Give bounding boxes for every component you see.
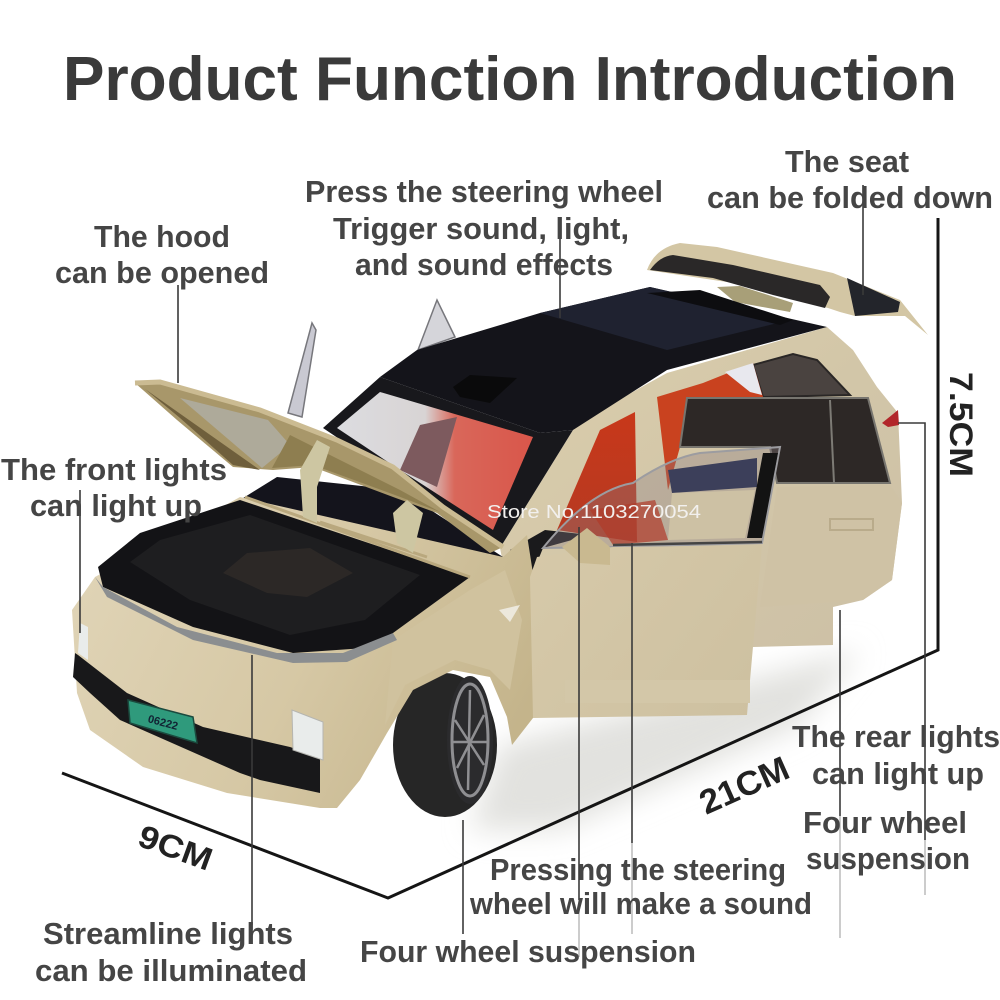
- icon: folded mirrors: [288, 300, 455, 417]
- right headlamp: [292, 710, 323, 760]
- door panel: [530, 545, 762, 718]
- label: steering wheel line 3: and sound effects: [355, 247, 613, 282]
- left headlamp: [78, 623, 88, 660]
- label: the rear lights: The rear lights: [792, 719, 1000, 754]
- dimension: 9CM: 9CM: [134, 818, 217, 878]
- engine cover: [223, 548, 353, 597]
- dimension: 21CM: 21CM: [694, 749, 795, 822]
- side marker: [499, 605, 520, 622]
- dimension: 7.5CM: 7.5CM: [943, 372, 979, 477]
- door pillar: [747, 453, 778, 538]
- callout leader lines: [80, 185, 925, 934]
- car illustration: [72, 243, 928, 817]
- label: can light up rear: can light up: [812, 756, 984, 791]
- label: steering wheel line 2: Trigger sound, light,: [333, 211, 629, 246]
- rear door: [680, 398, 902, 607]
- floor shadow: [470, 650, 860, 830]
- rear quarter window: [753, 354, 850, 397]
- right hood strut: [393, 500, 423, 553]
- chrome strip: [95, 577, 397, 663]
- dimension lines: [62, 218, 938, 898]
- title: Product Function Introduction: [63, 45, 957, 114]
- label: streamline lights: Streamline lights: [43, 916, 293, 951]
- label: the front lights: The front lights: [1, 452, 227, 487]
- label: the hood: The hood: [94, 219, 230, 254]
- label: four wheel: Four wheel: [803, 805, 967, 840]
- label: can be opened: can be opened: [55, 255, 269, 290]
- left hood strut: [300, 440, 330, 523]
- windshield: [323, 377, 573, 548]
- cowl strip: [245, 497, 470, 577]
- engine bay: [98, 500, 470, 653]
- taillight: [882, 410, 899, 427]
- label: the seat: The seat: [785, 144, 909, 179]
- label: pressing the steering: Pressing the steering: [490, 852, 786, 887]
- label: can light up front: can light up: [30, 488, 202, 523]
- faint leader line tails: [579, 816, 925, 957]
- engine bay surround and cowl: [240, 477, 503, 577]
- open hood: [135, 382, 503, 553]
- front door: [530, 447, 780, 718]
- side body: [500, 327, 902, 700]
- fender highlight: [385, 570, 522, 725]
- front body: [72, 497, 534, 808]
- license plate: [128, 700, 197, 743]
- cabin windows: [557, 363, 763, 542]
- black under front door: [510, 530, 590, 580]
- label: can be illuminated: can be illuminated: [35, 953, 307, 988]
- label: wheel will make a sound: wheel will make a sound: [469, 886, 812, 921]
- label: can be folded down: can be folded down: [707, 180, 993, 215]
- inner bay recess: [130, 515, 420, 635]
- tailgate: [647, 243, 928, 335]
- label: four wheel suspension: Four wheel suspension: [360, 934, 696, 969]
- front tyre: [393, 673, 497, 817]
- watermark: Store No.1103270054: [487, 502, 701, 522]
- grille: [73, 653, 320, 793]
- license plate: 06222: [146, 713, 179, 733]
- roof: [380, 287, 827, 433]
- door window tint: [543, 447, 780, 548]
- label: steering wheel line 1: Press the steering wheel: [305, 174, 663, 209]
- mirror: [562, 528, 610, 565]
- label: suspension: suspension: [806, 841, 970, 876]
